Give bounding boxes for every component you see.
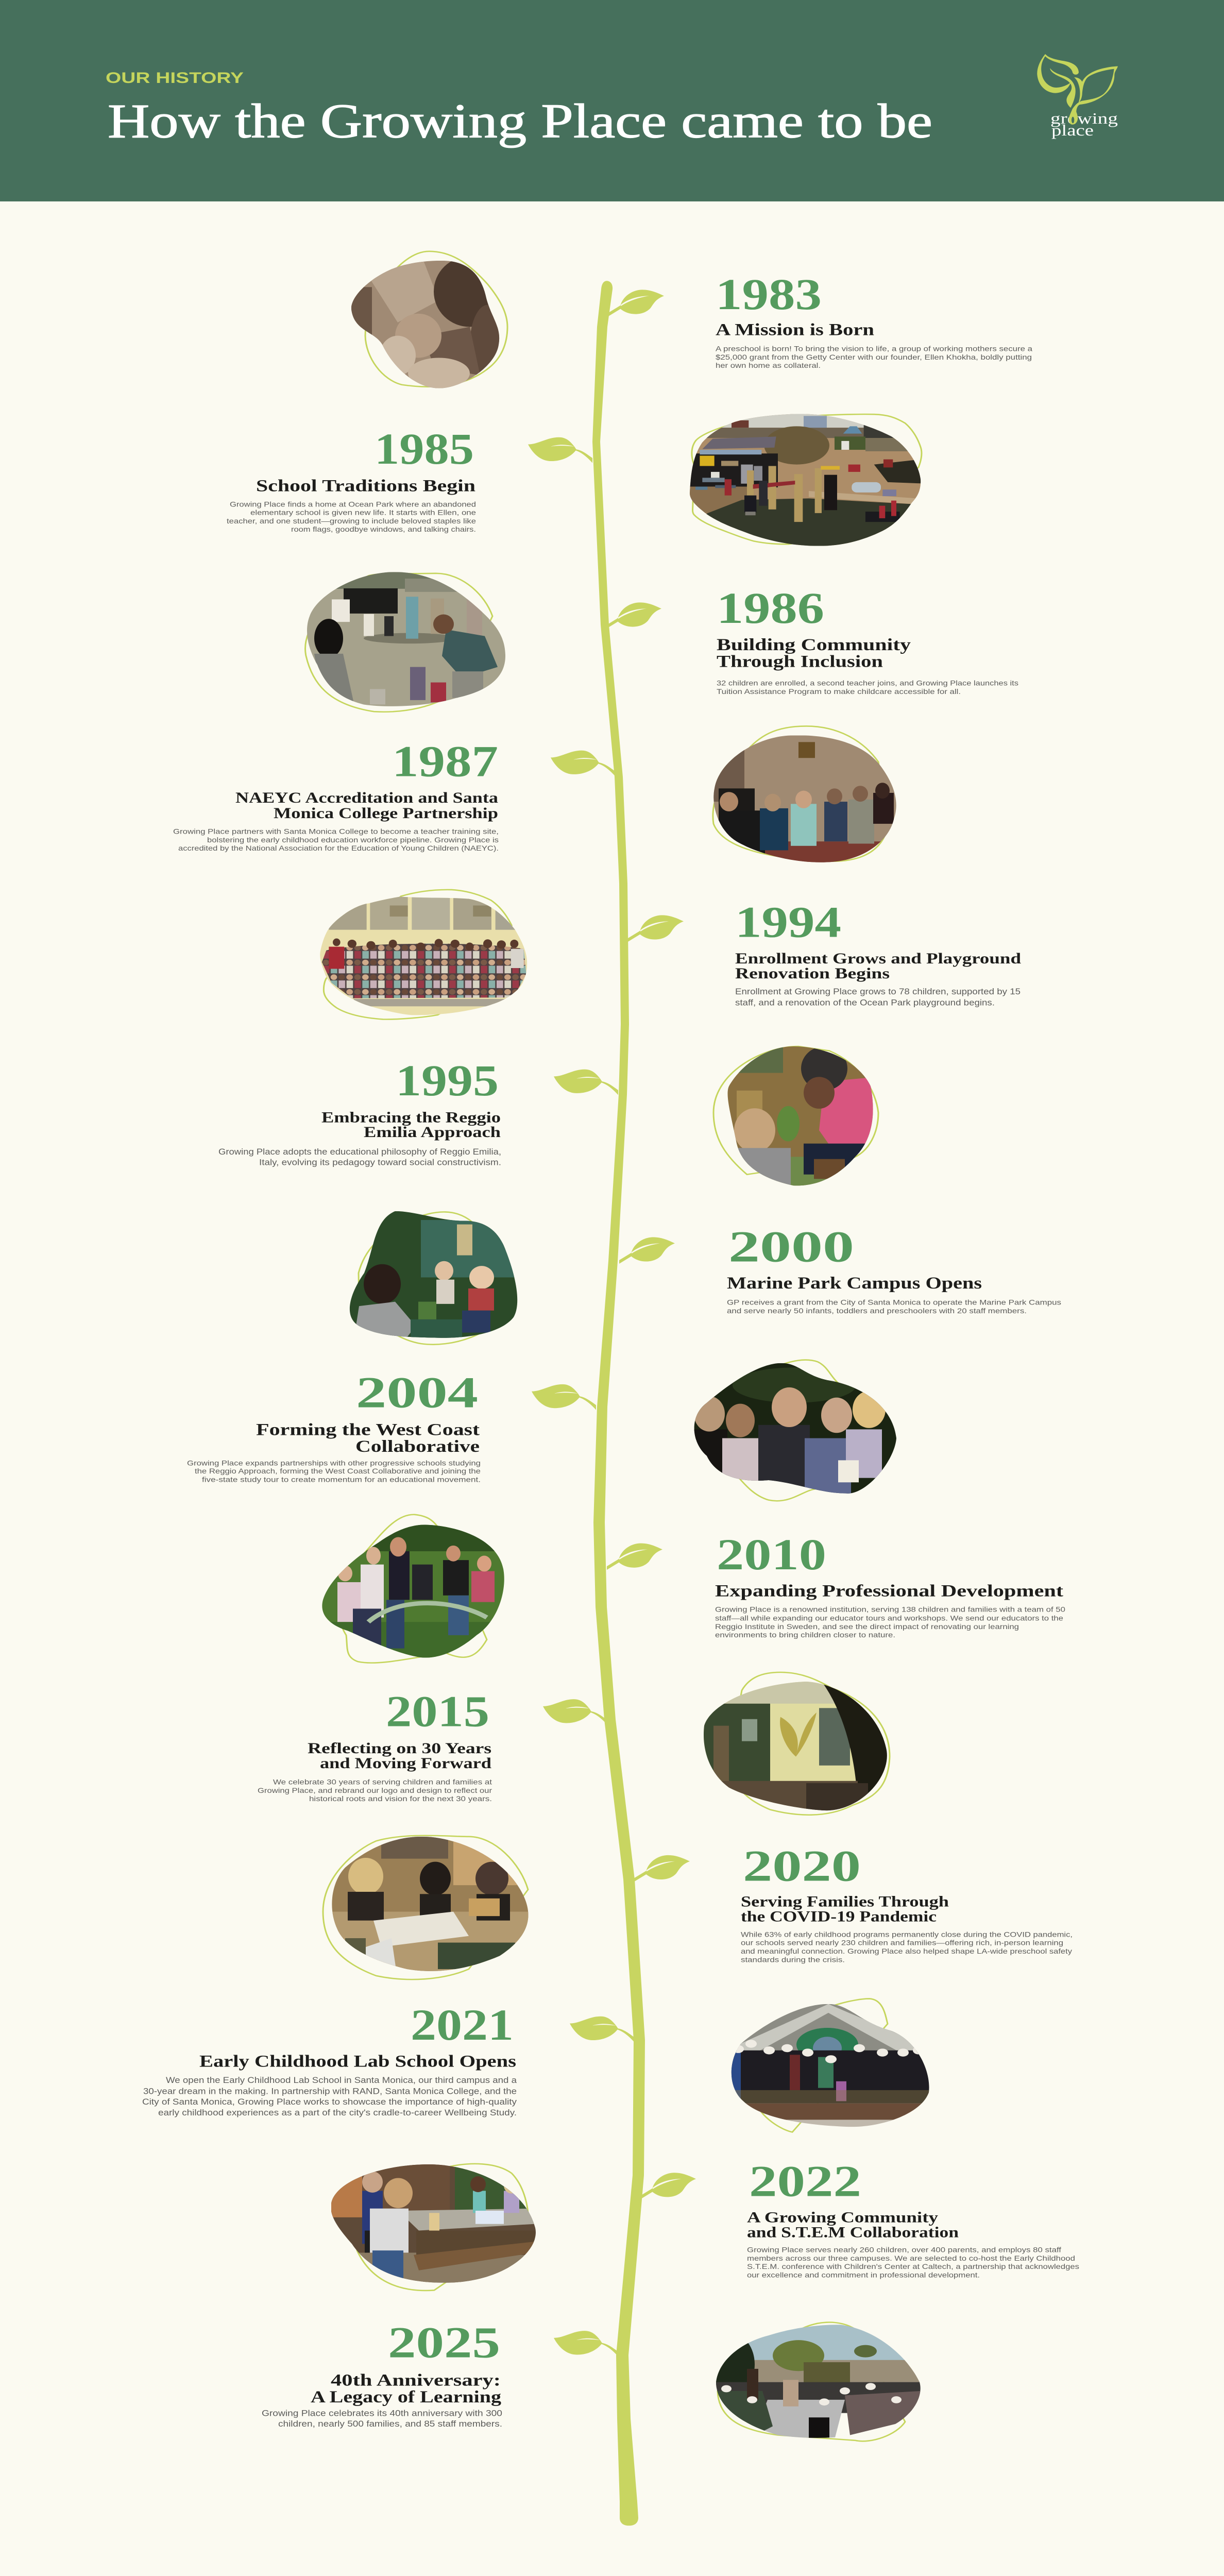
body text — [262, 2409, 502, 2429]
photo: class group portrait — [320, 889, 528, 1020]
body text: Growing Place serves nearly 260 children, over 400 parents, and employs 80 staff — [747, 2247, 1062, 2254]
body text: our excellence and commitment in professional development. — [747, 2272, 980, 2279]
timeline entry: 1987 — [173, 737, 499, 853]
body text: bolstering the early childhood education workforce pipeline. Growing Place is — [207, 837, 499, 844]
body text: Growing Place adopts the educational philosophy of Reggio Emilia, — [218, 1147, 501, 1157]
title: How the Growing Place came to be — [108, 95, 932, 148]
heading: Enrollment Grows and Playground — [735, 950, 1021, 967]
body text: members across our three campuses. We are selected to co-host the Early Childhood — [747, 2255, 1075, 2263]
body text — [716, 346, 1033, 370]
heading: Monica College Partnership — [274, 805, 498, 822]
year: 2020 — [743, 1842, 861, 1891]
heading: NAEYC Accreditation and Santa — [235, 789, 498, 806]
eyebrow: our history: OUR HISTORY — [106, 69, 244, 87]
body text — [717, 680, 1018, 696]
year: 1985 — [375, 425, 474, 474]
body text — [187, 1460, 481, 1484]
heading: A Legacy of Learning — [311, 2387, 501, 2406]
body text: A preschool is born! To bring the vision to life, a group of working mothers secure a — [716, 346, 1033, 353]
body text: elementary school is given new life. It starts with Ellen, one — [250, 510, 476, 517]
heading: Expanding Professional Development — [715, 1581, 1063, 1600]
heading — [311, 2370, 501, 2406]
photo: mother and child reading (sepia) — [351, 251, 507, 388]
body text — [715, 1606, 1065, 1639]
heading — [321, 1109, 501, 1141]
heading: and S.T.E.M Collaboration — [747, 2224, 959, 2241]
body text: City of Santa Monica, Growing Place works to showcase the importance of high-quality — [142, 2097, 517, 2107]
timeline entry: 2015 — [258, 1687, 492, 1803]
body text — [218, 1147, 501, 1167]
body text — [258, 1779, 492, 1803]
body text: Tuition Assistance Program to make childcare accessible for all. — [717, 688, 961, 696]
heading: 40th Anniversary: — [331, 2370, 501, 2389]
photo: teacher and toddler — [713, 1046, 878, 1188]
body text: Enrollment at Growing Place grows to 78 children, supported by 15 — [735, 987, 1021, 996]
year: 1983 — [716, 270, 822, 319]
body text: Growing Place is a renowned institution, serving 138 children and families with a team of 50 — [715, 1606, 1065, 1614]
body text: staff—all while expanding our educator tours and workshops. We send our educators to the — [715, 1615, 1063, 1622]
stem leaves — [528, 290, 696, 2357]
heading: Embracing the Reggio — [321, 1109, 501, 1126]
heading: Serving Families Through — [741, 1893, 949, 1910]
body text: and meaningful connection. Growing Place also helped shape LA-wide preschool safety — [741, 1948, 1073, 1956]
photo: teachers seated in a room — [713, 726, 899, 868]
heading — [308, 1740, 491, 1772]
body text: We celebrate 30 years of serving children and families at — [273, 1779, 492, 1786]
body text: While 63% of early childhood programs permanently close during the COVID pandemic, — [741, 1931, 1073, 1939]
body text: standards during the crisis. — [741, 1956, 845, 1964]
body text — [142, 2075, 517, 2117]
heading: Marine Park Campus Opens — [727, 1273, 982, 1292]
body text: $25,000 grant from the Getty Center with our founder, Ellen Khokha, boldly putting — [716, 354, 1032, 362]
photo: women on playground equipment — [322, 1515, 507, 1663]
body text: Growing Place partners with Santa Monica College to become a teacher training site, — [173, 828, 499, 836]
body text: and serve nearly 50 infants, toddlers and preschoolers with 20 staff members. — [727, 1308, 1027, 1315]
body text — [741, 1931, 1073, 1964]
body text: five-state study tour to create momentum for an educational movement. — [202, 1476, 481, 1484]
body text: our schools served nearly 230 children and families—offering rich, in-person learning — [741, 1940, 1063, 1947]
timeline entry: 2021 — [142, 2001, 517, 2117]
body text — [735, 987, 1021, 1007]
body text: accredited by the National Association for the Education of Young Children (NAEYC). — [178, 845, 499, 853]
body text: the Reggio Approach, forming the West Coast Collaborative and joining the — [195, 1468, 481, 1476]
body text: GP receives a grant from the City of Santa Monica to operate the Marine Park Campus — [727, 1299, 1061, 1307]
heading: A Mission is Born — [716, 320, 874, 339]
logo: growing place — [1037, 54, 1118, 140]
body text: Reggio Institute in Sweden, and see the direct impact of renovating our learning — [715, 1623, 1019, 1631]
heading — [735, 950, 1021, 982]
timeline entry: 1995 — [218, 1057, 501, 1167]
body text: children, nearly 500 families, and 85 staff members. — [278, 2419, 502, 2429]
photo: circle of families — [305, 572, 508, 712]
body text — [227, 501, 476, 534]
year: 2021 — [411, 2001, 514, 2050]
year: 2004 — [356, 1368, 478, 1417]
photo: anniversary gathering — [708, 2323, 922, 2441]
body text: S.T.E.M. conference with Children's Center at Caltech, a partnership that acknowledges — [747, 2263, 1079, 2271]
logo: growing place: growing — [1050, 110, 1118, 127]
heading: School Traditions Begin — [256, 476, 475, 495]
timeline entry: 1985 — [227, 425, 476, 534]
logo: growing place: place — [1051, 122, 1094, 140]
body text: teacher, and one student—growing to include beloved staples like — [227, 518, 476, 526]
body text: 30-year dream in the making. In partnership with RAND, Santa Monica College, and the — [143, 2087, 517, 2096]
body text — [747, 2247, 1079, 2279]
photo: school building with logo — [703, 1672, 894, 1816]
body text: Growing Place, and rebrand our logo and design to reflect our — [258, 1787, 492, 1795]
heading: Reflecting on 30 Years — [308, 1740, 491, 1757]
heading: Forming the West Coast — [256, 1420, 480, 1439]
photo: teacher with infants outdoors — [349, 1211, 521, 1345]
heading: Collaborative — [355, 1437, 480, 1455]
timeline entry: 1983 — [716, 270, 1033, 370]
timeline entry: 1986 — [717, 584, 1018, 696]
year: 2015 — [386, 1687, 489, 1736]
timeline entry: 2000 — [727, 1223, 1061, 1315]
year: 2025 — [388, 2318, 500, 2367]
year: 1994 — [735, 898, 841, 947]
body text — [173, 828, 499, 853]
body text: Growing Place expands partnerships with other progressive schools studying — [187, 1460, 481, 1467]
heading: A Growing Community — [747, 2209, 938, 2226]
heading: and Moving Forward — [320, 1755, 491, 1772]
heading: Early Childhood Lab School Opens — [199, 2052, 516, 2071]
timeline entry: 2022 — [747, 2157, 1079, 2279]
timeline entry: 2025 — [262, 2318, 502, 2429]
photo: playground — [685, 409, 927, 550]
body text: her own home as collateral. — [716, 362, 821, 370]
heading: Through Inclusion — [717, 652, 883, 671]
heading: Building Community — [717, 635, 911, 654]
body text — [727, 1299, 1061, 1315]
body text: environments to bring children closer to nature. — [715, 1632, 895, 1639]
body text: Italy, evolving its pedagogy toward social constructivism. — [259, 1158, 501, 1167]
photo: children woodworking — [331, 2164, 537, 2291]
timeline entry: 2020 — [741, 1842, 1073, 1964]
photo: children at nature table — [323, 1836, 531, 1979]
body text: Growing Place celebrates its 40th anniversary with 300 — [262, 2409, 502, 2418]
heading — [235, 789, 498, 822]
body text: We open the Early Childhood Lab School in Santa Monica, our third campus and a — [166, 2075, 517, 2085]
photo: groundbreaking ceremony — [730, 1998, 931, 2132]
year: 2022 — [749, 2157, 861, 2206]
year: 1995 — [396, 1057, 499, 1106]
year: 1986 — [717, 584, 824, 633]
heading: Renovation Begins — [735, 965, 890, 982]
heading — [741, 1893, 949, 1925]
body text: room flags, goodbye windows, and talking chairs. — [291, 526, 476, 534]
header band — [0, 0, 1224, 201]
timeline entry: 2010 — [715, 1531, 1065, 1639]
body text: staff, and a renovation of the Ocean Park playground begins. — [735, 998, 995, 1007]
heading — [256, 1420, 480, 1455]
timeline entry: 1994 — [735, 898, 1021, 1007]
year: 1987 — [392, 737, 498, 786]
heading: the COVID-19 Pandemic — [741, 1908, 937, 1925]
year: 2000 — [728, 1223, 854, 1272]
timeline stem — [592, 281, 645, 2526]
timeline entry: 2004 — [187, 1368, 481, 1484]
body text: early childhood experiences as a part of the city's cradle-to-career Wellbeing Study. — [158, 2108, 517, 2117]
photo: five staff members — [691, 1360, 897, 1501]
body text: historical roots and vision for the next 30 years. — [309, 1795, 492, 1803]
body text: Growing Place finds a home at Ocean Park where an abandoned — [230, 501, 476, 509]
heading — [717, 635, 911, 671]
body text: 32 children are enrolled, a second teacher joins, and Growing Place launches its — [717, 680, 1018, 687]
heading: Emilia Approach — [364, 1124, 501, 1141]
year: 2010 — [717, 1531, 826, 1579]
heading — [747, 2209, 959, 2241]
